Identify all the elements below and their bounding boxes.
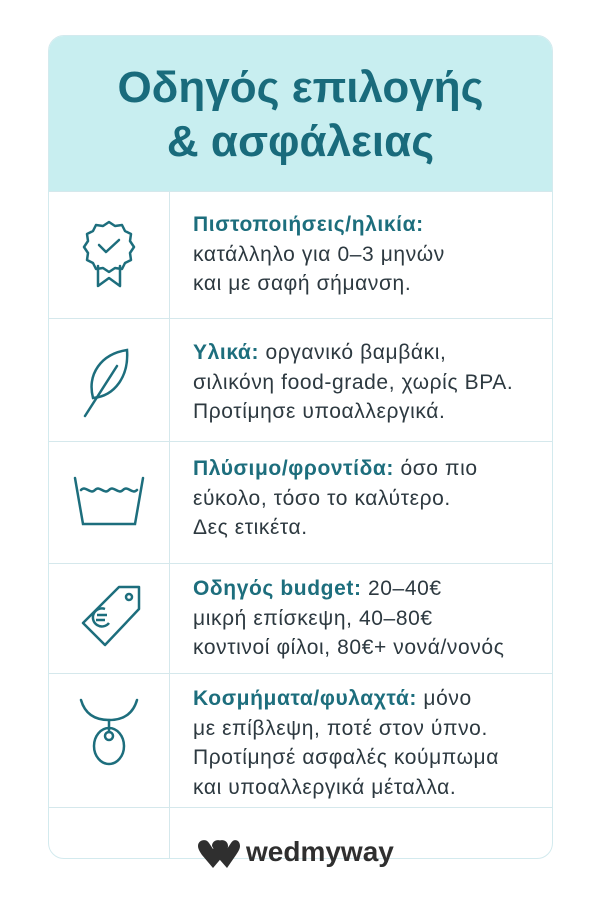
icon: wash xyxy=(74,476,144,526)
text: budget: κοντινοί φίλοι, 80€+ νονά/νονός xyxy=(193,636,504,659)
header xyxy=(49,36,552,191)
text: certifications: Πιστοποιήσεις/ηλικία: xyxy=(193,213,424,236)
text: budget: μικρή επίσκεψη, 40–80€ xyxy=(193,606,433,630)
icon: pendant xyxy=(80,698,138,766)
logo: wedmyway xyxy=(246,836,394,867)
text: certifications: και με σαφή σήμανση. xyxy=(193,272,411,295)
text: washing: εύκολο, τόσο το καλύτερο. xyxy=(193,486,451,510)
icon: badge xyxy=(82,220,136,288)
text: washing: Δες ετικέτα. xyxy=(193,516,308,539)
text: materials: Προτίμησε υποαλλεργικά. xyxy=(193,400,445,423)
text: budget xyxy=(193,577,504,659)
title: & ασφάλειας xyxy=(167,117,434,166)
text: certifications xyxy=(193,213,445,295)
title: Οδηγός επιλογής xyxy=(117,63,484,112)
text: jewelry: και υποαλλεργικά μέταλλα. xyxy=(193,776,456,798)
text: jewelry: Προτίμησέ ασφαλές κούμπωμα xyxy=(193,746,499,769)
text: certifications: κατάλληλο για 0–3 μηνών xyxy=(193,242,445,266)
text: materials xyxy=(193,341,513,423)
text: jewelry: με επίβλεψη, ποτέ στον ύπνο. xyxy=(193,716,488,740)
card xyxy=(48,35,553,859)
text: washing xyxy=(193,457,478,539)
text: materials: σιλικόνη food-grade, χωρίς BPA. xyxy=(193,370,513,394)
icon: price tag xyxy=(82,586,140,646)
text: budget: Οδηγός budget: 20–40€ xyxy=(193,577,442,600)
text: materials: Υλικά: οργανικό βαμβάκι, xyxy=(193,341,446,364)
icon: leaf xyxy=(84,348,128,418)
text: jewelry xyxy=(193,687,499,798)
title xyxy=(117,63,484,166)
text: jewelry: Κοσμήματα/φυλαχτά: μόνο xyxy=(193,687,472,710)
text: washing: Πλύσιμο/φροντίδα: όσο πιο xyxy=(193,457,478,480)
